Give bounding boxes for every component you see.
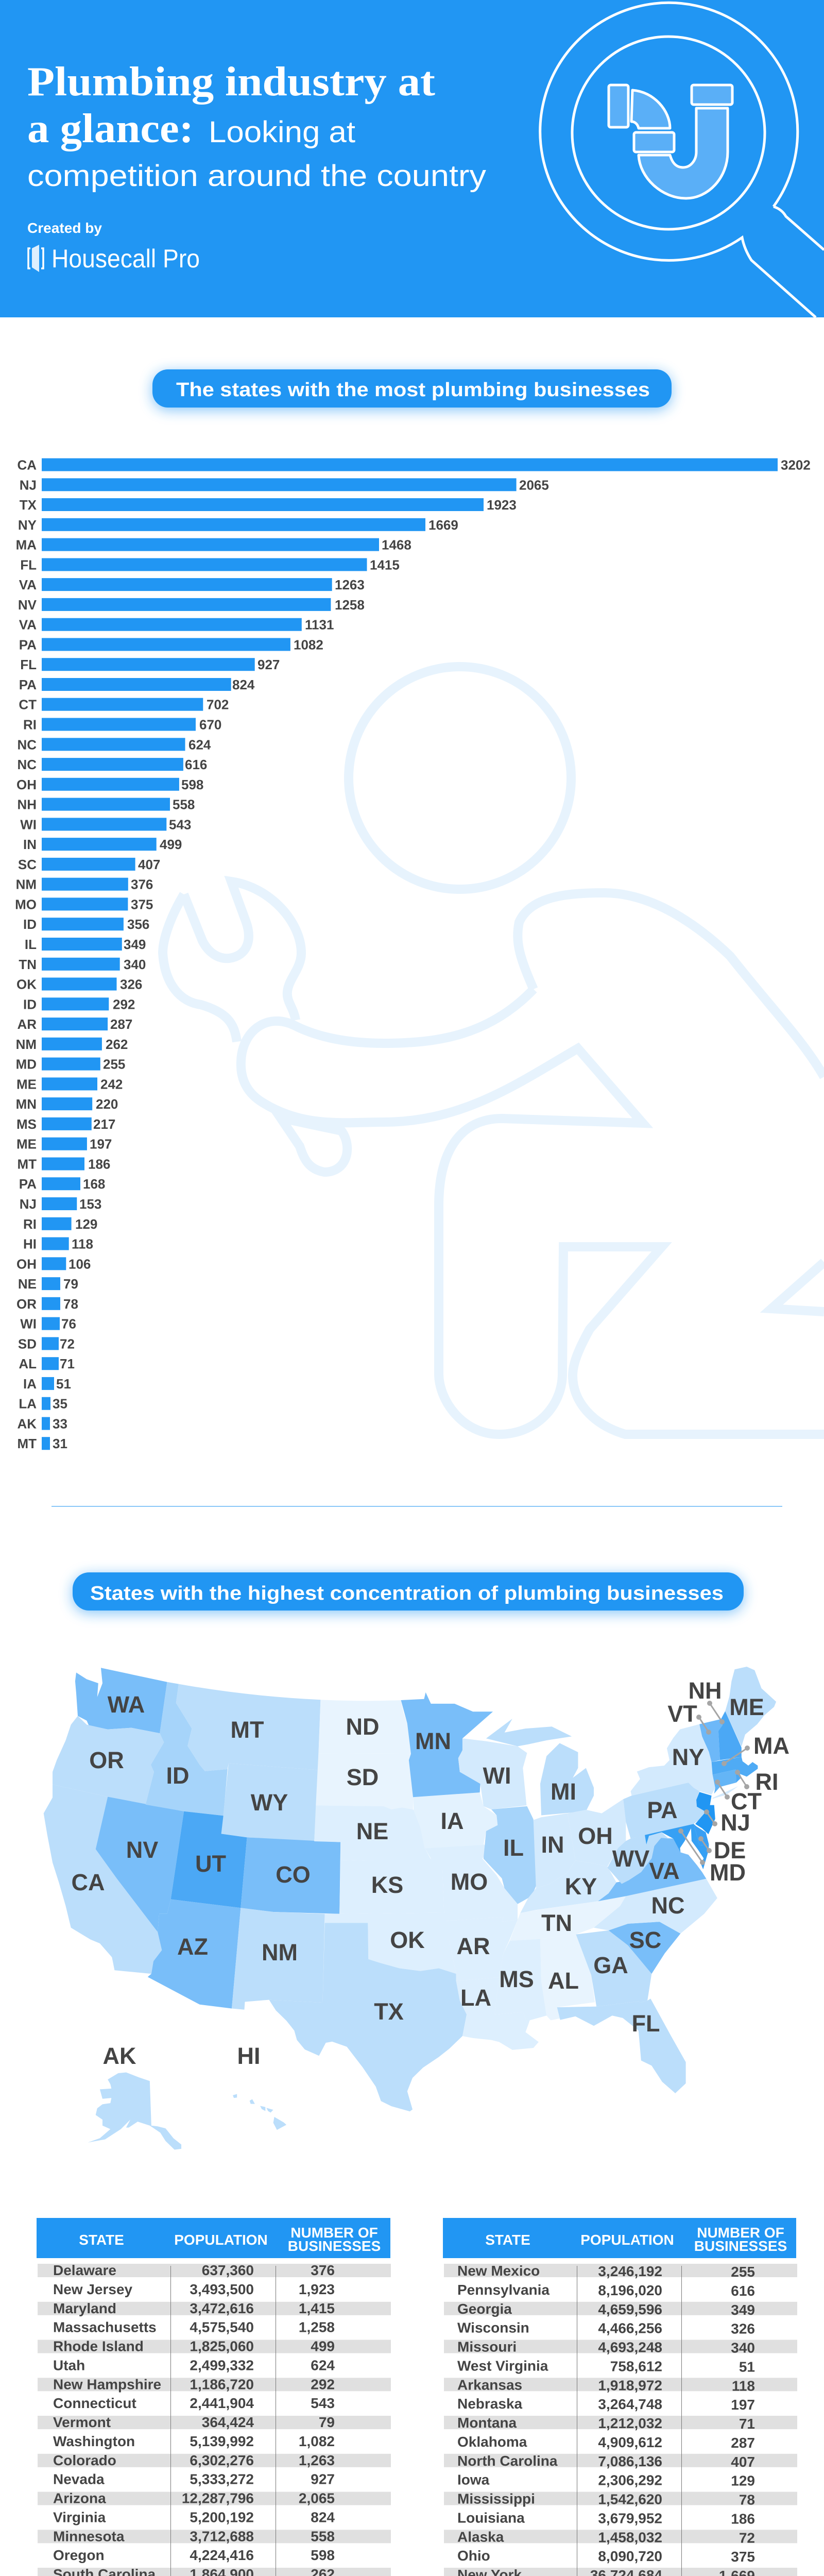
- bar chart: businesses per state: IL: [25, 937, 37, 952]
- header banner: [0, 0, 824, 317]
- map state labels: PA: [647, 1797, 678, 1823]
- bar chart: businesses per state: 356: [127, 917, 149, 932]
- bar chart: businesses per state: 51: [56, 1376, 71, 1392]
- table rows: 1,082: [299, 2433, 335, 2449]
- bar chart: businesses per state: MO: [15, 896, 37, 912]
- table rows: 3,493,500: [190, 2281, 254, 2297]
- table header: NUMBER OF: [290, 2225, 378, 2241]
- bar chart: businesses per state: 927: [258, 657, 280, 672]
- table rows: Nevada: [53, 2471, 105, 2487]
- map state labels: AR: [456, 1933, 490, 1959]
- map state labels: IL: [503, 1835, 524, 1861]
- map state labels: MI: [551, 1778, 576, 1805]
- map state labels: MN: [415, 1728, 451, 1754]
- bar chart: businesses per state: NC: [17, 737, 37, 752]
- bar chart: businesses per state: 168: [83, 1176, 105, 1192]
- table rows: 824: [311, 2509, 335, 2525]
- table rows: 1,186,720: [190, 2376, 254, 2392]
- bar chart: businesses per state: 2065: [519, 477, 549, 493]
- magnifying glass icon: [540, 3, 824, 317]
- table rows: Oregon: [53, 2547, 105, 2563]
- table rows: 1,458,032: [598, 2529, 662, 2545]
- bar chart: businesses per state: 1263: [335, 577, 365, 592]
- bar chart: businesses per state: 287: [110, 1016, 132, 1032]
- bar chart: businesses per state: NJ: [20, 1196, 37, 1212]
- bar chart: businesses per state: OK: [16, 977, 37, 992]
- table header: [37, 2218, 390, 2258]
- table rows: 2,499,332: [190, 2357, 254, 2373]
- map state labels: TX: [374, 1998, 404, 2025]
- map state labels: IN: [541, 1832, 564, 1858]
- bar chart: businesses per state: 349: [124, 937, 146, 952]
- map state labels: NC: [651, 1892, 685, 1919]
- bar chart: businesses per state: [15, 457, 811, 1451]
- map state labels: NV: [126, 1837, 158, 1863]
- bar chart: businesses per state: PA: [19, 1176, 37, 1192]
- map state labels: MS: [499, 1966, 534, 1992]
- bar chart: businesses per state: RI: [23, 1216, 37, 1232]
- map state labels: NJ: [720, 1809, 750, 1836]
- map state labels: OH: [578, 1823, 613, 1849]
- bar chart: businesses per state: IN: [23, 837, 37, 852]
- table header: [443, 2218, 796, 2258]
- table rows: 637,360: [202, 2262, 254, 2278]
- bar chart: businesses per state: 220: [96, 1096, 118, 1112]
- table rows: 71: [739, 2416, 755, 2432]
- bar chart: businesses per state: SC: [18, 857, 37, 872]
- table rows: Iowa: [457, 2472, 490, 2488]
- bar chart: businesses per state: 3202: [781, 457, 811, 473]
- bar chart: businesses per state: 153: [79, 1196, 101, 1212]
- bar chart: businesses per state: OH: [16, 1256, 37, 1272]
- table rows: Pennsylvania: [457, 2282, 550, 2298]
- table rows: [53, 2262, 335, 2576]
- table rows: 543: [311, 2395, 335, 2411]
- map state labels: KS: [371, 1872, 403, 1898]
- table: right states: [443, 2218, 797, 2576]
- table rows: 79: [319, 2414, 335, 2430]
- table rows: 12,287,796: [182, 2490, 254, 2506]
- bar chart: businesses per state: 118: [72, 1236, 93, 1252]
- table rows: Colorado: [53, 2452, 116, 2468]
- bar chart: businesses per state: 1258: [335, 597, 365, 613]
- map state labels: NE: [356, 1818, 388, 1844]
- bar chart: businesses per state: 186: [88, 1156, 110, 1172]
- bar chart: businesses per state: ME: [16, 1076, 37, 1092]
- bar chart: businesses per state: AK: [17, 1416, 37, 1431]
- table rows: 197: [731, 2397, 755, 2413]
- table rows: 1,918,972: [598, 2377, 662, 2393]
- table rows: 292: [311, 2376, 335, 2392]
- table rows: 5,333,272: [190, 2471, 254, 2487]
- title: Plumbing industry at: [27, 59, 435, 105]
- table header: BUSINESSES: [694, 2238, 787, 2254]
- map state labels: ND: [346, 1714, 379, 1740]
- table rows: 340: [731, 2340, 755, 2355]
- table rows: 78: [739, 2492, 755, 2508]
- watermark: plumber with wrench: [163, 667, 824, 1434]
- map state labels: AZ: [177, 1934, 208, 1960]
- bar chart: businesses per state: CT: [19, 697, 37, 713]
- leader lines for small states: [679, 1701, 749, 1864]
- title: [27, 59, 486, 193]
- table rows: 3,246,192: [598, 2263, 662, 2279]
- table rows: 598: [311, 2547, 335, 2563]
- bar chart: businesses per state: NJ: [20, 477, 37, 493]
- bar chart: businesses per state: MN: [16, 1096, 37, 1112]
- map state labels: CA: [71, 1869, 105, 1895]
- bar chart: businesses per state: MT: [17, 1436, 37, 1451]
- bar chart: businesses per state: 35: [53, 1396, 67, 1412]
- bar chart: businesses per state: PA: [19, 637, 37, 652]
- bar chart: businesses per state: VA: [19, 577, 37, 592]
- bar chart: businesses per state: WI: [20, 817, 37, 832]
- table rows: 2,306,292: [598, 2472, 662, 2488]
- bar chart: businesses per state: FL: [20, 557, 37, 572]
- bar chart: businesses per state: TN: [19, 957, 37, 972]
- section heading: states with the highest concentration: [73, 1572, 744, 1613]
- table rows: Vermont: [53, 2414, 111, 2430]
- map state labels: CT: [731, 1788, 762, 1815]
- title: competition around the country: [27, 159, 486, 193]
- map state labels: FL: [632, 2010, 660, 2037]
- bar chart: businesses per state: AL: [19, 1356, 37, 1371]
- table rows: Alaska: [457, 2529, 504, 2545]
- map state labels: ID: [166, 1762, 190, 1789]
- table rows: Rhode Island: [53, 2338, 144, 2354]
- table rows: 4,659,596: [598, 2301, 662, 2317]
- bar chart: businesses per state: AR: [17, 1016, 37, 1032]
- table rows: 375: [731, 2549, 755, 2565]
- table rows: 5,139,992: [190, 2433, 254, 2449]
- bar chart: businesses per state: 197: [90, 1137, 112, 1152]
- table rows: Louisiana: [457, 2510, 525, 2526]
- table rows: 72: [739, 2530, 755, 2546]
- choropleth map: plumbing concentration by state: [44, 1667, 789, 2149]
- table rows: 3,679,952: [598, 2510, 662, 2526]
- table rows: 4,575,540: [190, 2319, 254, 2335]
- bar chart: businesses per state: OH: [16, 777, 37, 792]
- map state labels: CO: [276, 1861, 311, 1888]
- map state labels: MD: [710, 1859, 746, 1886]
- bar chart: businesses per state: 292: [113, 996, 135, 1012]
- map state labels: DE: [714, 1837, 746, 1863]
- table rows: 8,090,720: [598, 2548, 662, 2564]
- table rows: New Hampshire: [53, 2376, 161, 2392]
- map state labels: MT: [231, 1717, 264, 1743]
- map state labels: AK: [103, 2043, 136, 2069]
- map state labels: TN: [541, 1910, 572, 1936]
- bar chart: businesses per state: 1468: [382, 537, 411, 553]
- table header: POPULATION: [174, 2232, 268, 2248]
- bar chart: businesses per state: 217: [93, 1116, 115, 1132]
- map state labels: OK: [390, 1927, 425, 1953]
- bar chart: businesses per state: ID: [23, 917, 37, 932]
- bar chart: businesses per state: 1669: [428, 517, 458, 533]
- map state labels: OR: [89, 1747, 124, 1773]
- table header: BUSINESSES: [288, 2238, 381, 2254]
- map state labels: RI: [755, 1769, 779, 1795]
- table rows: 4,693,248: [598, 2339, 662, 2355]
- table rows: Arkansas: [457, 2377, 522, 2393]
- bar chart: businesses per state: VA: [19, 617, 37, 633]
- table rows: 51: [739, 2359, 755, 2375]
- table: left states: [37, 2218, 391, 2576]
- bar chart: businesses per state: ME: [16, 1137, 37, 1152]
- map state labels: IA: [441, 1808, 464, 1834]
- bar chart: businesses per state: 670: [199, 717, 221, 733]
- table rows: 407: [731, 2454, 755, 2470]
- map state labels: [71, 1677, 789, 2069]
- bar chart: businesses per state: 79: [63, 1276, 78, 1292]
- table rows: 927: [311, 2471, 335, 2487]
- map state labels: SC: [629, 1927, 661, 1953]
- table rows: Maryland: [53, 2300, 116, 2316]
- bar chart: businesses per state: 78: [63, 1296, 78, 1312]
- table rows: North Carolina: [457, 2453, 558, 2469]
- table rows: 499: [311, 2338, 335, 2354]
- map state labels: SD: [347, 1764, 379, 1790]
- bar chart: businesses per state: 499: [160, 837, 182, 852]
- table rows: 1,923: [299, 2281, 335, 2297]
- table rows: 186: [731, 2511, 755, 2527]
- bar chart: businesses per state: NM: [16, 877, 37, 892]
- bar chart: businesses per state: 71: [60, 1356, 75, 1371]
- bar chart: businesses per state: TX: [20, 497, 37, 513]
- table rows: 4,224,416: [190, 2547, 254, 2563]
- map state labels: GA: [593, 1952, 628, 1978]
- bar chart: businesses per state: 129: [75, 1216, 97, 1232]
- table rows: 616: [731, 2283, 755, 2299]
- table header: STATE: [485, 2232, 530, 2248]
- bar chart: businesses per state: 598: [181, 777, 203, 792]
- bar chart: businesses per state: 558: [173, 797, 195, 812]
- bar chart: businesses per state: MT: [17, 1156, 37, 1172]
- map state labels: NH: [688, 1677, 722, 1704]
- created by label: Created by: [27, 220, 102, 236]
- table rows: 1,258: [299, 2319, 335, 2335]
- section heading: states with the most plumbing businesses: The states with the most plumbing businesses: [176, 379, 650, 401]
- map state labels: VT: [667, 1701, 697, 1727]
- table rows: 118: [732, 2378, 755, 2394]
- bar chart: businesses per state: MA: [16, 537, 37, 553]
- bar chart: businesses per state: ID: [23, 996, 37, 1012]
- table rows: Minnesota: [53, 2528, 125, 2544]
- bar chart: businesses per state: 326: [120, 977, 142, 992]
- section heading: states with the most plumbing businesses: [152, 369, 672, 410]
- bar chart: businesses per state: 1082: [294, 637, 323, 652]
- map state labels: KY: [565, 1873, 597, 1900]
- bar chart: businesses per state: NE: [18, 1276, 37, 1292]
- bar chart: businesses per state: 616: [185, 757, 207, 772]
- bar chart: businesses per state: LA: [19, 1396, 37, 1412]
- table rows: Arizona: [53, 2490, 106, 2506]
- table rows: 3,264,748: [598, 2396, 662, 2412]
- table rows: 287: [731, 2435, 755, 2451]
- bar chart: businesses per state: WI: [20, 1316, 37, 1332]
- table rows: 129: [731, 2473, 755, 2489]
- table rows: 5,200,192: [190, 2509, 254, 2525]
- bar chart: businesses per state: NV: [18, 597, 37, 613]
- bar chart: businesses per state: 543: [169, 817, 191, 832]
- bar chart: businesses per state: HI: [23, 1236, 37, 1252]
- table rows: Ohio: [457, 2548, 490, 2564]
- table rows: 8,196,020: [598, 2282, 662, 2298]
- table rows: Massachusetts: [53, 2319, 157, 2335]
- bar chart: businesses per state: OR: [16, 1296, 37, 1312]
- table header: POPULATION: [580, 2232, 674, 2248]
- table rows: 4,466,256: [598, 2320, 662, 2336]
- table rows: 2,065: [299, 2490, 335, 2506]
- bar chart: businesses per state: 375: [131, 896, 153, 912]
- bar chart: businesses per state: 824: [232, 677, 255, 692]
- table rows: Mississippi: [457, 2490, 535, 2507]
- bar chart: businesses per state: CA: [17, 457, 37, 473]
- map state labels: MO: [451, 1869, 488, 1895]
- map state labels: AL: [548, 1968, 579, 1994]
- table rows: Delaware: [53, 2262, 116, 2278]
- bar chart: businesses per state: 31: [53, 1436, 67, 1451]
- table rows: Connecticut: [53, 2395, 136, 2411]
- bar chart: businesses per state: 407: [138, 857, 160, 872]
- table header: STATE: [79, 2232, 124, 2248]
- map state labels: LA: [460, 1985, 491, 2011]
- bar chart: businesses per state: 255: [103, 1057, 125, 1072]
- bar chart: businesses per state: NC: [17, 757, 37, 772]
- map state labels: WV: [612, 1845, 649, 1872]
- bar chart: businesses per state: 624: [188, 737, 211, 752]
- table rows: 1,263: [299, 2452, 335, 2468]
- table rows: 1,212,032: [598, 2415, 662, 2431]
- bar chart: businesses per state: MD: [16, 1057, 37, 1072]
- table rows: 2,441,904: [190, 2395, 254, 2411]
- table rows: 1,542,620: [598, 2492, 662, 2507]
- table rows: 255: [731, 2264, 755, 2280]
- map state labels: HI: [237, 2043, 261, 2069]
- table rows: 6,302,276: [190, 2452, 254, 2468]
- table rows: 364,424: [202, 2414, 254, 2430]
- table rows: Missouri: [457, 2339, 517, 2354]
- table rows: 349: [731, 2302, 755, 2318]
- map state labels: ME: [729, 1694, 764, 1720]
- title: Looking at: [209, 115, 355, 149]
- bar chart: businesses per state: 33: [53, 1416, 67, 1431]
- table rows: 326: [731, 2321, 755, 2337]
- table rows: West Virginia: [457, 2358, 548, 2374]
- bar chart: businesses per state: 262: [106, 1037, 128, 1052]
- bar chart: businesses per state: 702: [207, 697, 229, 713]
- table header: NUMBER OF: [697, 2225, 784, 2241]
- bar chart: businesses per state: 106: [68, 1256, 91, 1272]
- map state labels: NM: [262, 1939, 298, 1965]
- logo: Housecall Pro: Housecall Pro: [52, 244, 200, 273]
- title: a glance:: [27, 106, 194, 151]
- map state labels: UT: [195, 1851, 226, 1877]
- map state labels: WA: [108, 1691, 145, 1718]
- table rows: 758,612: [610, 2358, 662, 2374]
- table rows: Washington: [53, 2433, 135, 2449]
- table rows: Montana: [457, 2415, 517, 2431]
- table rows: 376: [311, 2262, 335, 2278]
- table rows: Virginia: [53, 2509, 106, 2525]
- table rows: Wisconsin: [457, 2320, 529, 2336]
- table rows: Oklahoma: [457, 2434, 527, 2450]
- table rows: 3,712,688: [190, 2528, 254, 2544]
- map state labels: NY: [672, 1744, 704, 1770]
- bar chart: businesses per state: 242: [100, 1076, 123, 1092]
- bar chart: businesses per state: NY: [18, 517, 37, 533]
- map state labels: WY: [251, 1789, 288, 1816]
- table rows: 4,909,612: [598, 2434, 662, 2450]
- map state labels: MA: [753, 1733, 789, 1759]
- bar chart: businesses per state: 1923: [487, 497, 517, 513]
- map state labels: WI: [483, 1762, 511, 1789]
- bar chart: businesses per state: RI: [23, 717, 37, 733]
- table rows: New Mexico: [457, 2263, 540, 2279]
- bar chart: businesses per state: 76: [61, 1316, 76, 1332]
- bar chart: businesses per state: IA: [23, 1376, 37, 1392]
- bar chart: businesses per state: MS: [16, 1116, 37, 1132]
- bar chart: businesses per state: PA: [19, 677, 37, 692]
- map state labels: VA: [649, 1858, 680, 1884]
- table rows: 624: [311, 2357, 335, 2373]
- table rows: 7,086,136: [598, 2453, 662, 2469]
- icon: drain pipe: [609, 85, 732, 198]
- table rows: 1,825,060: [190, 2338, 254, 2354]
- table rows: New Jersey: [53, 2281, 133, 2297]
- bar chart: businesses per state: FL: [20, 657, 37, 672]
- bar chart: businesses per state: 72: [60, 1336, 75, 1351]
- table rows: Georgia: [457, 2301, 512, 2317]
- bar chart: businesses per state: NM: [16, 1037, 37, 1052]
- bar chart: businesses per state: 1415: [370, 557, 400, 572]
- table rows: Nebraska: [457, 2396, 523, 2412]
- table rows: Utah: [53, 2357, 85, 2373]
- bar chart: businesses per state: 1131: [305, 617, 334, 633]
- section heading: states with the highest concentration: States with the highest concentration of plumbing businesses: [90, 1583, 724, 1604]
- bar chart: businesses per state: SD: [18, 1336, 37, 1351]
- table rows: [457, 2263, 755, 2576]
- bar chart: businesses per state: 340: [124, 957, 146, 972]
- table rows: 558: [311, 2528, 335, 2544]
- table rows: 3,472,616: [190, 2300, 254, 2316]
- table rows: 1,415: [299, 2300, 335, 2316]
- bar chart: businesses per state: NH: [17, 797, 37, 812]
- bar chart: businesses per state: 376: [131, 877, 153, 892]
